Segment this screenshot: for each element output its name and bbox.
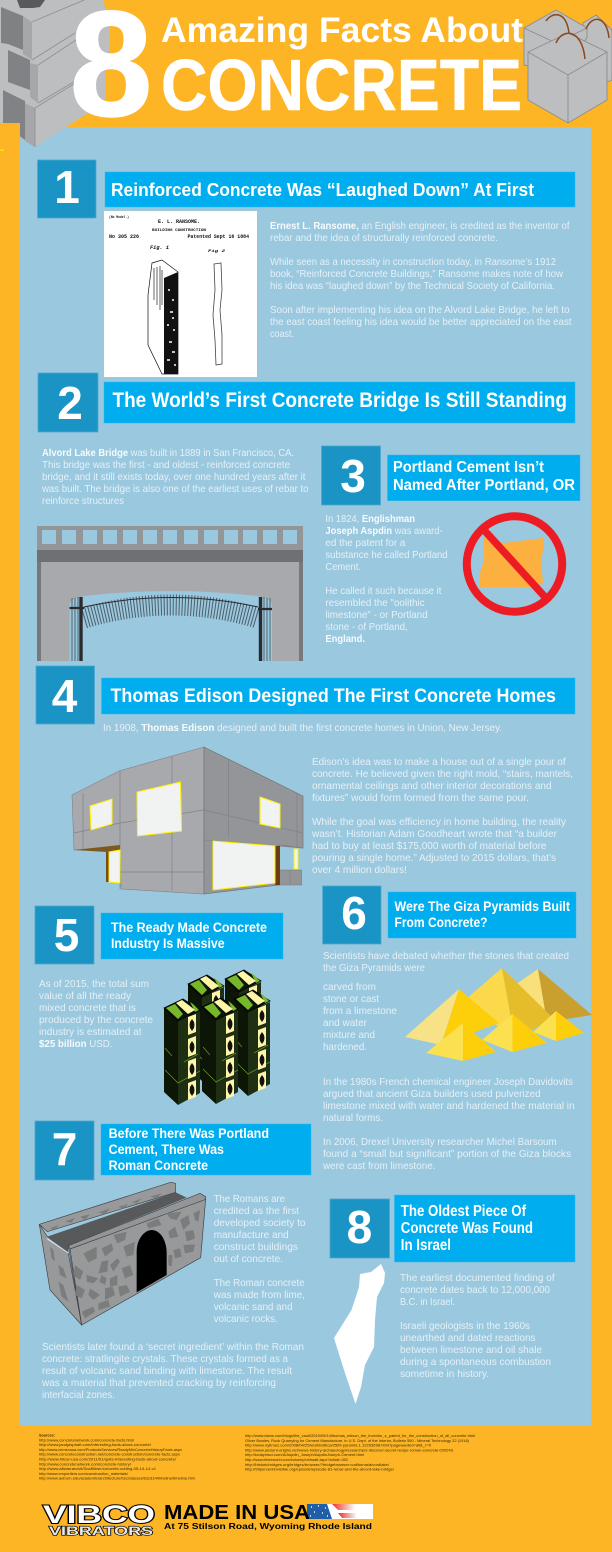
sources: http://www.elbeeworld.com/industry/cinfraaft.aspx?article=302 bbox=[245, 1457, 349, 1462]
patent drawing bbox=[104, 211, 257, 377]
heading 4: Thomas Edison Designed The First Concrete Homes bbox=[110, 686, 556, 707]
heading 6 bbox=[388, 892, 576, 938]
sources: http://todayinsci.com/A/Aspdin_Joseph/AspdinJoseph-Cement.html bbox=[245, 1452, 364, 1457]
text block 3: England. bbox=[325, 634, 365, 645]
left orange strip bbox=[0, 123, 20, 1434]
text block 1: Soon after implementing his idea on the Alvord Lake Bridge, he left to bbox=[270, 305, 570, 316]
text block 1: book, “Reinforced Concrete Buildings,” Ransome makes note of how bbox=[270, 269, 563, 280]
patent drawing: (No Model.) bbox=[109, 215, 129, 220]
heading 6: From Concrete? bbox=[394, 914, 488, 930]
text block 8: unearthed and dated reactions bbox=[400, 1333, 536, 1344]
panel: fact 8 bbox=[330, 1195, 575, 1404]
text block 3: In 1824, Englishman bbox=[325, 514, 415, 525]
text block 7: result of volcanic sand binding with limestone. The result bbox=[42, 1366, 292, 1377]
number badge 8: 8 bbox=[347, 1201, 372, 1253]
sources: http://www.hilcar-usa.com/2011/01/quite-interesting-facts-about-concrete/ bbox=[39, 1456, 177, 1462]
logo: Vibco Vibrators: VIBCO bbox=[43, 1501, 155, 1529]
number badge 2 bbox=[38, 373, 98, 432]
heading 5: Industry Is Massive bbox=[111, 936, 225, 951]
text block 7: out of concrete. bbox=[214, 1254, 283, 1265]
text block 4: wasn’t. Historian Adam Goodheart wrote that “a builder bbox=[311, 829, 558, 840]
text block 7: volcanic sand and bbox=[214, 1302, 293, 1313]
text block 7: manufacture and bbox=[214, 1230, 289, 1241]
patent drawing: Fig 2 bbox=[208, 249, 226, 254]
text block 8: between limestone and oil shale bbox=[400, 1345, 542, 1356]
number badge 5: 5 bbox=[54, 909, 79, 961]
panel: fact 7 bbox=[35, 1121, 311, 1401]
text block 6: In 2006, Drexel University researcher Michel Barsoum bbox=[323, 1137, 557, 1148]
icon: American flag bbox=[307, 1504, 373, 1519]
icon: stacked concrete blocks bbox=[0, 0, 110, 147]
text block 1: While seen as a necessity in construction today, in Ransome’s 1912 bbox=[270, 257, 556, 268]
text block 4: ornamental ceilings and other interior decorations and bbox=[312, 781, 552, 792]
logo: Vibco Vibrators: VIBRATORS bbox=[49, 1524, 153, 1538]
text block 3: He called it such because it bbox=[325, 586, 441, 597]
text block 5: value of all the ready bbox=[39, 991, 132, 1002]
text block 7: construct buildings bbox=[214, 1242, 298, 1253]
title: Amazing Facts About bbox=[161, 11, 523, 50]
text block 6 bbox=[322, 951, 575, 1172]
panel: fact 5 bbox=[35, 906, 283, 1105]
text block 1: rebar and the idea of structurally reinforced concrete. bbox=[270, 233, 498, 244]
text block 1 bbox=[270, 221, 572, 340]
heading 7 bbox=[101, 1124, 311, 1175]
number badge 1 bbox=[38, 160, 96, 218]
text block 5: $25 billion USD. bbox=[39, 1039, 112, 1050]
text block 6: argued that ancient Giza builders used pulverized bbox=[323, 1089, 541, 1100]
text block 4: Edison’s idea was to make a house out of a single pour of bbox=[312, 757, 566, 768]
icon: concrete bags bbox=[524, 10, 612, 123]
sources: http://www.jandjasphalt.com/interesting-facts-about-concrete/ bbox=[39, 1442, 152, 1447]
text block 7: Scientists later found a ‘secret ingredient’ within the Roman bbox=[42, 1342, 304, 1353]
number badge 1: 1 bbox=[54, 161, 80, 213]
panel: fact 1 bbox=[38, 160, 575, 377]
text block 6: hardened. bbox=[323, 1042, 367, 1053]
text block 8: concrete dates back to 12,000,000 bbox=[400, 1285, 550, 1296]
heading 4 bbox=[102, 678, 575, 714]
number badge 6: 6 bbox=[341, 887, 367, 939]
text block 6: found a “small but significant” portion of the Giza blocks bbox=[323, 1149, 571, 1160]
number badge 6 bbox=[323, 886, 381, 944]
number badge 4: 4 bbox=[52, 670, 78, 722]
text block 3: substance he called Portland bbox=[325, 550, 448, 561]
text block 8: B.C. in Israel. bbox=[400, 1297, 455, 1308]
text block 6: stone or cast bbox=[323, 994, 379, 1005]
illustration: concrete house bbox=[72, 747, 303, 894]
illustration: pyramids bbox=[405, 968, 592, 1061]
heading 1 bbox=[105, 172, 575, 207]
text block 7: concrete: stratlingite crystals. These crystals formed as a bbox=[42, 1354, 288, 1365]
text block 3: Cement. bbox=[325, 562, 361, 573]
text block 5 bbox=[39, 979, 153, 1050]
heading 2: The World’s First Concrete Bridge Is Still Standing bbox=[112, 389, 567, 412]
sources: http://www.allstarrarcivil/Scaffiliner/concrete-cutting-05-14-14-v1 bbox=[39, 1466, 157, 1471]
panel: fact 6 bbox=[322, 886, 592, 1172]
text block 6: limestone mixed with water and hardened the material in bbox=[323, 1101, 575, 1112]
heading 7: Roman Concrete bbox=[109, 1157, 208, 1173]
text block 8: during a spontaneous combustion bbox=[400, 1357, 551, 1368]
text block 6: natural forms. bbox=[323, 1113, 383, 1124]
sources: http://www.cmportiers.com/construction_materials/ bbox=[39, 1471, 129, 1476]
text block 7 bbox=[41, 1194, 306, 1401]
text block 2: reinforce structures bbox=[42, 496, 124, 507]
sources: http://www.concretenetwork.com/concrete-facts.html bbox=[39, 1437, 134, 1442]
text block 6: Scientists have debated whether the stones that created bbox=[323, 951, 569, 962]
text block 8: Israeli geologists in the 1960s bbox=[400, 1321, 530, 1332]
icon: no-Oregon sign bbox=[467, 516, 562, 612]
text block 3: resembled the "oolithic bbox=[325, 598, 425, 609]
number badge 8 bbox=[330, 1199, 390, 1258]
text block 4 bbox=[311, 757, 573, 876]
sources: http://www.nytimes.com/2008/04/25/world/africa/25iht-pyramid.1.12293598.html?pagewanted=all&_r=0 bbox=[245, 1443, 432, 1448]
text block 7: was a material that prevented cracking by reinforcing bbox=[41, 1378, 276, 1389]
text block 7: was made from lime, bbox=[213, 1290, 305, 1301]
panel: fact 2 bbox=[37, 373, 575, 661]
heading 8 bbox=[394, 1195, 575, 1262]
text block 2: was built. The bridge is also one of the earliest uses of rebar to bbox=[41, 484, 309, 495]
text block 4: fixtures” would form formed from the same pour. bbox=[312, 793, 529, 804]
icon: map of Israel bbox=[334, 1264, 385, 1404]
text block 7: developed society to bbox=[214, 1218, 306, 1229]
text block 5: industry is estimated at bbox=[39, 1027, 142, 1038]
title bbox=[70, 0, 523, 148]
sources: Oliver Bowles, Rock Quarrying for Cement Manufacture, in U.S. Dept. of the Interior, Bulletin 550 - Mineral Technology 22 (1918) bbox=[245, 1438, 470, 1443]
text block 7: credited as the first bbox=[214, 1206, 299, 1217]
sources bbox=[39, 1432, 475, 1481]
text block 6: mixture and bbox=[323, 1030, 375, 1041]
patent drawing: E. L. RANSOME. bbox=[158, 219, 200, 225]
text block 1: coast. bbox=[270, 329, 294, 340]
heading 7: Before There Was Portland bbox=[109, 1125, 269, 1141]
number badge 7 bbox=[35, 1121, 94, 1180]
illustration: Roman concrete wall bbox=[39, 1182, 206, 1325]
text block 6: from a limestone bbox=[323, 1006, 397, 1017]
heading 3 bbox=[388, 455, 580, 501]
heading 7: Cement, There Was bbox=[109, 1141, 224, 1157]
text block 4: over 4 million dollars! bbox=[312, 865, 407, 876]
text block 4: had to buy at least $175,000 worth of material before bbox=[312, 841, 547, 852]
sources: http://www.auburn.edu/academic/architecture/bsc/classes/bsc314/timeline/timeline.htm bbox=[39, 1476, 196, 1481]
heading 3: Named After Portland, OR bbox=[393, 477, 575, 494]
text block 7: The Roman concrete bbox=[214, 1278, 305, 1289]
logo: Vibco Vibrators bbox=[43, 1501, 155, 1538]
panel: fact 3 bbox=[322, 446, 580, 645]
footer: made in USA: MADE IN USA bbox=[164, 1502, 310, 1524]
text block 6: carved from bbox=[323, 982, 376, 993]
heading 5: The Ready Made Concrete bbox=[111, 920, 267, 935]
sources: http://www.cemexusa.com/ProductsServices/ReadyMixConcreteHistoryFacts.aspx bbox=[39, 1447, 182, 1452]
footer: made in USA: At 75 Stilson Road, Wyoming Rhode Island bbox=[164, 1522, 372, 1531]
number badge 5 bbox=[35, 906, 94, 964]
number badge 3: 3 bbox=[340, 450, 366, 502]
text block 4: pouring a single home.” Adjusted to 2015 dollars, that’s bbox=[312, 853, 556, 864]
text block 3 bbox=[325, 514, 448, 645]
heading 8: In Israel bbox=[401, 1237, 451, 1254]
text block 5: produced by the concrete bbox=[39, 1015, 153, 1026]
heading 1: Reinforced Concrete Was “Laughed Down” At First bbox=[111, 179, 535, 200]
heading 5 bbox=[101, 913, 283, 959]
patent drawing: No 305 226 bbox=[109, 234, 139, 240]
number badge 7: 7 bbox=[52, 1123, 77, 1175]
text block 1: his idea was “laughed down” by the Technical Society of California. bbox=[270, 281, 555, 292]
sources: http://www.concreteconstruction.net/concrete-construction/concrete-facts.aspx bbox=[39, 1452, 180, 1457]
number badge 4 bbox=[36, 666, 94, 724]
heading 8: The Oldest Piece Of bbox=[401, 1203, 527, 1220]
patent drawing: Patented Sept 16 1884 bbox=[188, 234, 249, 240]
text block 2 bbox=[41, 448, 309, 507]
yellow mark bbox=[0, 150, 4, 151]
patent drawing: Fig. 1 bbox=[150, 245, 169, 251]
heading 8: Concrete Was Found bbox=[401, 1220, 533, 1237]
text block 5: mixed concrete that is bbox=[39, 1003, 136, 1014]
text block 7: The Romans are bbox=[214, 1194, 285, 1205]
heading 2 bbox=[104, 382, 575, 423]
number badge 2: 2 bbox=[57, 377, 83, 429]
panel: fact 4 bbox=[36, 666, 575, 894]
text block 8 bbox=[400, 1273, 555, 1380]
illustration: Alvord Lake Bridge bbox=[37, 526, 303, 661]
footer: made in USA bbox=[164, 1502, 372, 1531]
text block 2: Alvord Lake Bridge was built in 1889 in San Francisco, CA. bbox=[42, 448, 294, 459]
text block 6: were cast from limestone. bbox=[322, 1161, 436, 1172]
text block 2: This bridge was the first - and oldest - reinforced concrete bbox=[42, 460, 290, 471]
text block 2: bridge, and it still exists today, over one hundred years after it bbox=[42, 472, 306, 483]
title: CONCRETE bbox=[161, 46, 522, 126]
text block 4: concrete. He believed given the right mold, “stairs, mantels, bbox=[312, 769, 573, 780]
number badge 3 bbox=[322, 446, 380, 505]
sources: http://99percentinvisible.org/episode/episode-81-rebar-and-the-alvord-lake-bridge/ bbox=[245, 1467, 395, 1472]
text block 1: Ernest L. Ransome, an English engineer, is credited as the inventor of bbox=[270, 221, 570, 232]
text block 3: stone - of Portland, bbox=[325, 622, 408, 633]
text block 6: In the 1980s French chemical engineer Joseph Davidovits bbox=[323, 1077, 573, 1088]
text block 6: the Giza Pyramids were bbox=[323, 963, 425, 974]
intro text 4: In 1908, Thomas Edison designed and built the first concrete homes in Union, New Jersey. bbox=[103, 723, 502, 734]
text block 8: sometime in history. bbox=[400, 1369, 489, 1380]
sources: Sources: bbox=[39, 1432, 55, 1438]
text block 3: limestone" - or Portland bbox=[325, 610, 428, 621]
text block 4: While the goal was efficiency in home building, the reality bbox=[312, 817, 567, 828]
heading 6: Were The Giza Pyramids Built bbox=[394, 898, 570, 914]
text block 1: the east coast feeling his idea would be better appreciated on the east bbox=[270, 317, 572, 328]
text block 6: and water bbox=[323, 1018, 368, 1029]
text block 8: The earliest documented finding of bbox=[400, 1273, 555, 1284]
background panel bbox=[20, 127, 591, 1426]
sources: http://historicbridges.org/bridges/browser/?bridgebrowser=california/alvordlake/ bbox=[245, 1462, 390, 1467]
patent drawing: BUILDING CONSTRUCTION bbox=[152, 229, 207, 233]
sources: http://www.dams.com/blogs/the_vault/2015/09/14/thomas_edison_the_inventor_s_patent_for_the_construction_of_all_concrete.html bbox=[245, 1433, 475, 1438]
heading 3: Portland Cement Isn’t bbox=[393, 459, 544, 476]
text block 5: As of 2015, the total sum bbox=[39, 979, 149, 990]
text block 3: ed the patent for a bbox=[325, 538, 406, 549]
icon: stacks of money bbox=[164, 970, 270, 1105]
text block 3: Joseph Aspdin was award- bbox=[325, 526, 443, 537]
text block 7: interfacial zones. bbox=[42, 1390, 115, 1401]
sources: http://www.ancient-origins.net/news-history-archaeology/researchers-discover-secret-recipe-roman-concrete-020243 bbox=[245, 1447, 454, 1452]
text block 7: volcanic rocks. bbox=[214, 1314, 278, 1325]
sources: http://www.concretenetwork.com/concrete-history/ bbox=[39, 1461, 132, 1466]
